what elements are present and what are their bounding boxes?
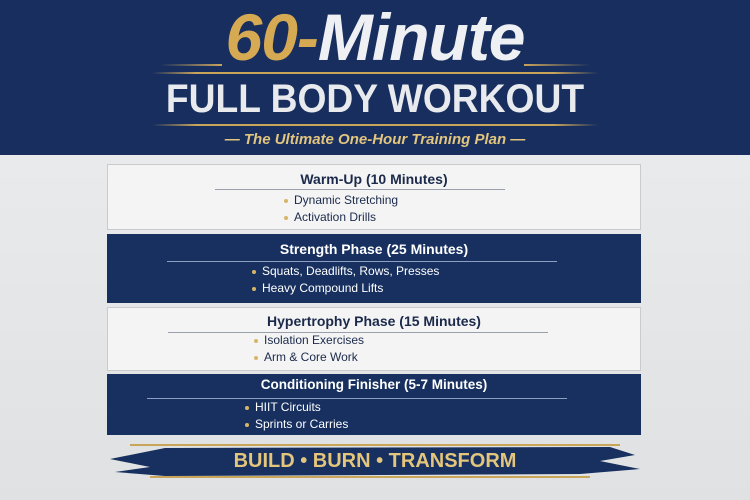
panel: strength: Heavy Compound Lifts [262, 281, 383, 295]
panel: strength: Strength Phase (25 Minutes) [280, 241, 468, 257]
panel: conditioning: Sprints or Carries [255, 417, 348, 431]
subtitle: — The Ultimate One-Hour Training Plan — [225, 131, 525, 148]
panel: conditioning [107, 374, 641, 435]
panel: hypertrophy: Hypertrophy Phase (15 Minutes) [267, 313, 481, 329]
panel: strength [107, 234, 641, 303]
panel: hypertrophy: Arm & Core Work [264, 350, 358, 364]
panel: warm-up: Warm-Up (10 Minutes) [300, 171, 448, 187]
panel: warm-up: Dynamic Stretching [294, 193, 398, 207]
title gold rules [152, 124, 598, 126]
panel: warm-up: Activation Drills [294, 210, 376, 224]
title: 60-Minute: 60-Minute [225, 0, 525, 74]
panel: hypertrophy [107, 307, 641, 371]
panel: strength: Squats, Deadlifts, Rows, Presses [262, 264, 439, 278]
banner: build burn transform [110, 444, 640, 478]
header band [0, 0, 750, 155]
panel: conditioning: Conditioning Finisher (5-7 Minutes) [261, 377, 487, 392]
panel: warm-up [107, 164, 641, 230]
panel: conditioning: HIIT Circuits [255, 400, 321, 414]
banner: build burn transform: BUILD • BURN • TRANSFORM [234, 450, 516, 472]
title: full body workout: FULL BODY WORKOUT [166, 77, 584, 121]
panel: hypertrophy: Isolation Exercises [264, 333, 364, 347]
